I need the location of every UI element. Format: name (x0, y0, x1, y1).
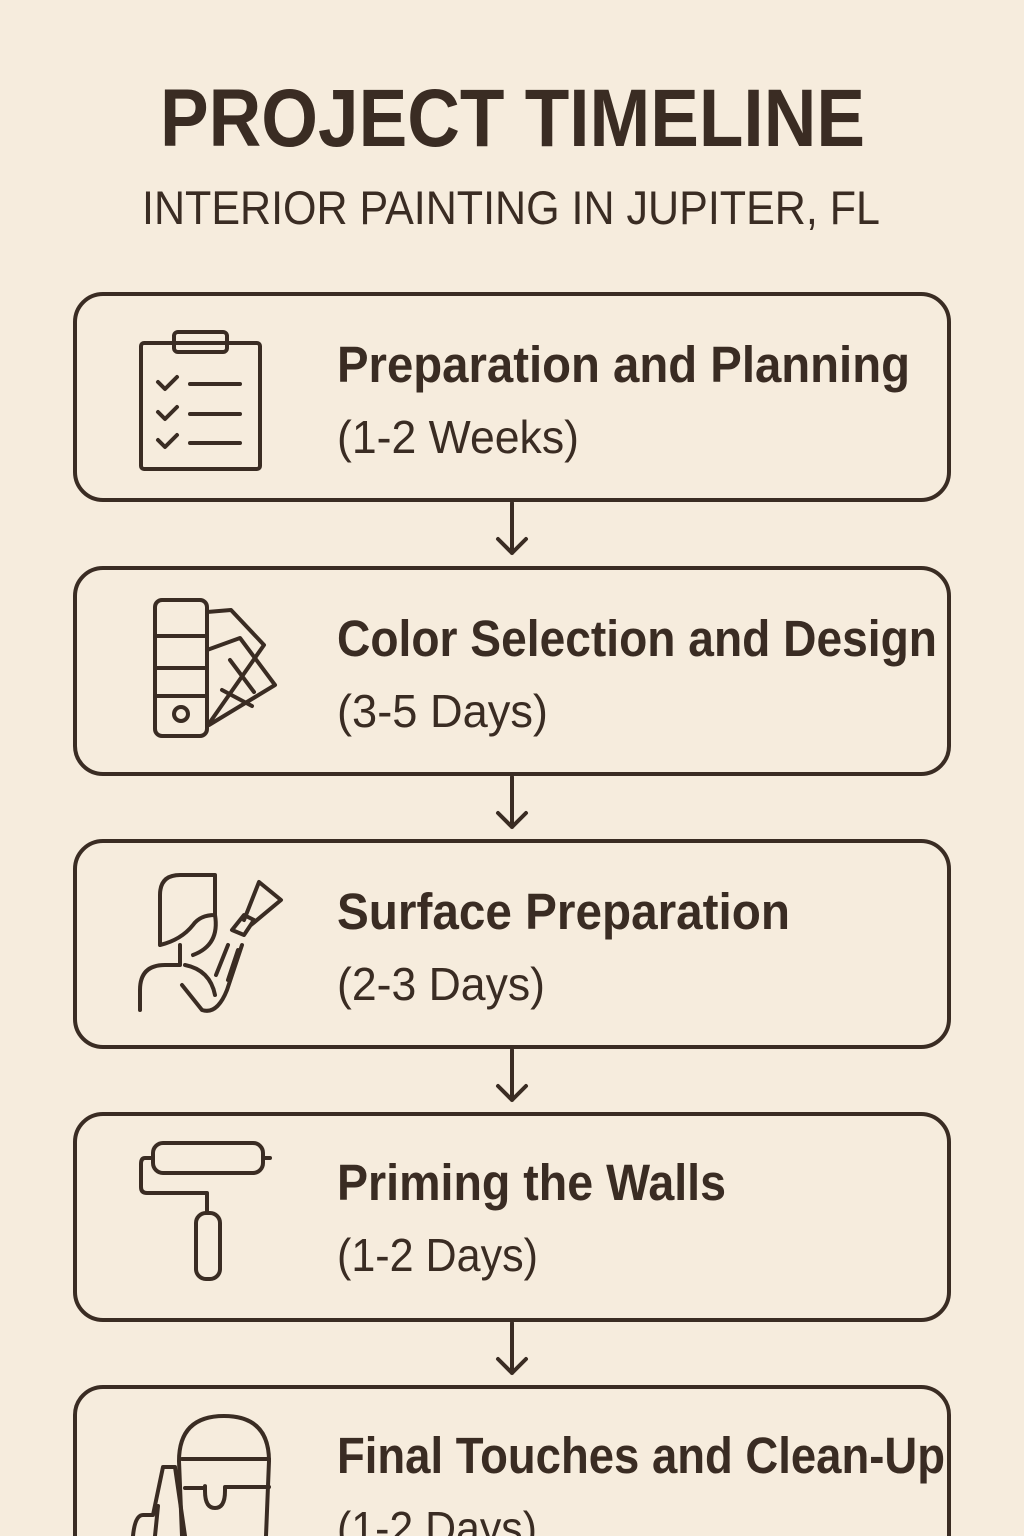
panel: color selection (75, 568, 949, 774)
title: PROJECT TIMELINE (160, 73, 865, 164)
heading: Priming the Walls (337, 1154, 726, 1211)
icon: worker with scraper (140, 875, 281, 1011)
icon: paint roller (141, 1143, 270, 1279)
duration: (2-3 Days) (337, 958, 545, 1010)
panel: preparation and planning (75, 294, 949, 500)
heading: Preparation and Planning (337, 336, 910, 393)
subtitle: INTERIOR PAINTING IN JUPITER, FL (142, 181, 880, 234)
arrow (498, 777, 526, 827)
panel: final touches (75, 1387, 949, 1536)
duration: (3-5 Days) (337, 685, 548, 737)
duration: (1-2 Days) (337, 1229, 538, 1281)
heading: Color Selection and Design (337, 610, 937, 667)
icon: color swatches (155, 600, 275, 736)
arrow (498, 1323, 526, 1373)
icon: clipboard (141, 332, 260, 469)
arrow (498, 1050, 526, 1100)
icon: paint bucket and brush (133, 1416, 269, 1536)
heading: Final Touches and Clean-Up (337, 1427, 945, 1484)
arrow (498, 503, 526, 553)
duration: (1-2 Weeks) (337, 411, 579, 463)
panel: surface preparation (75, 841, 949, 1047)
heading: Surface Preparation (337, 883, 790, 940)
panel: priming (75, 1114, 949, 1320)
